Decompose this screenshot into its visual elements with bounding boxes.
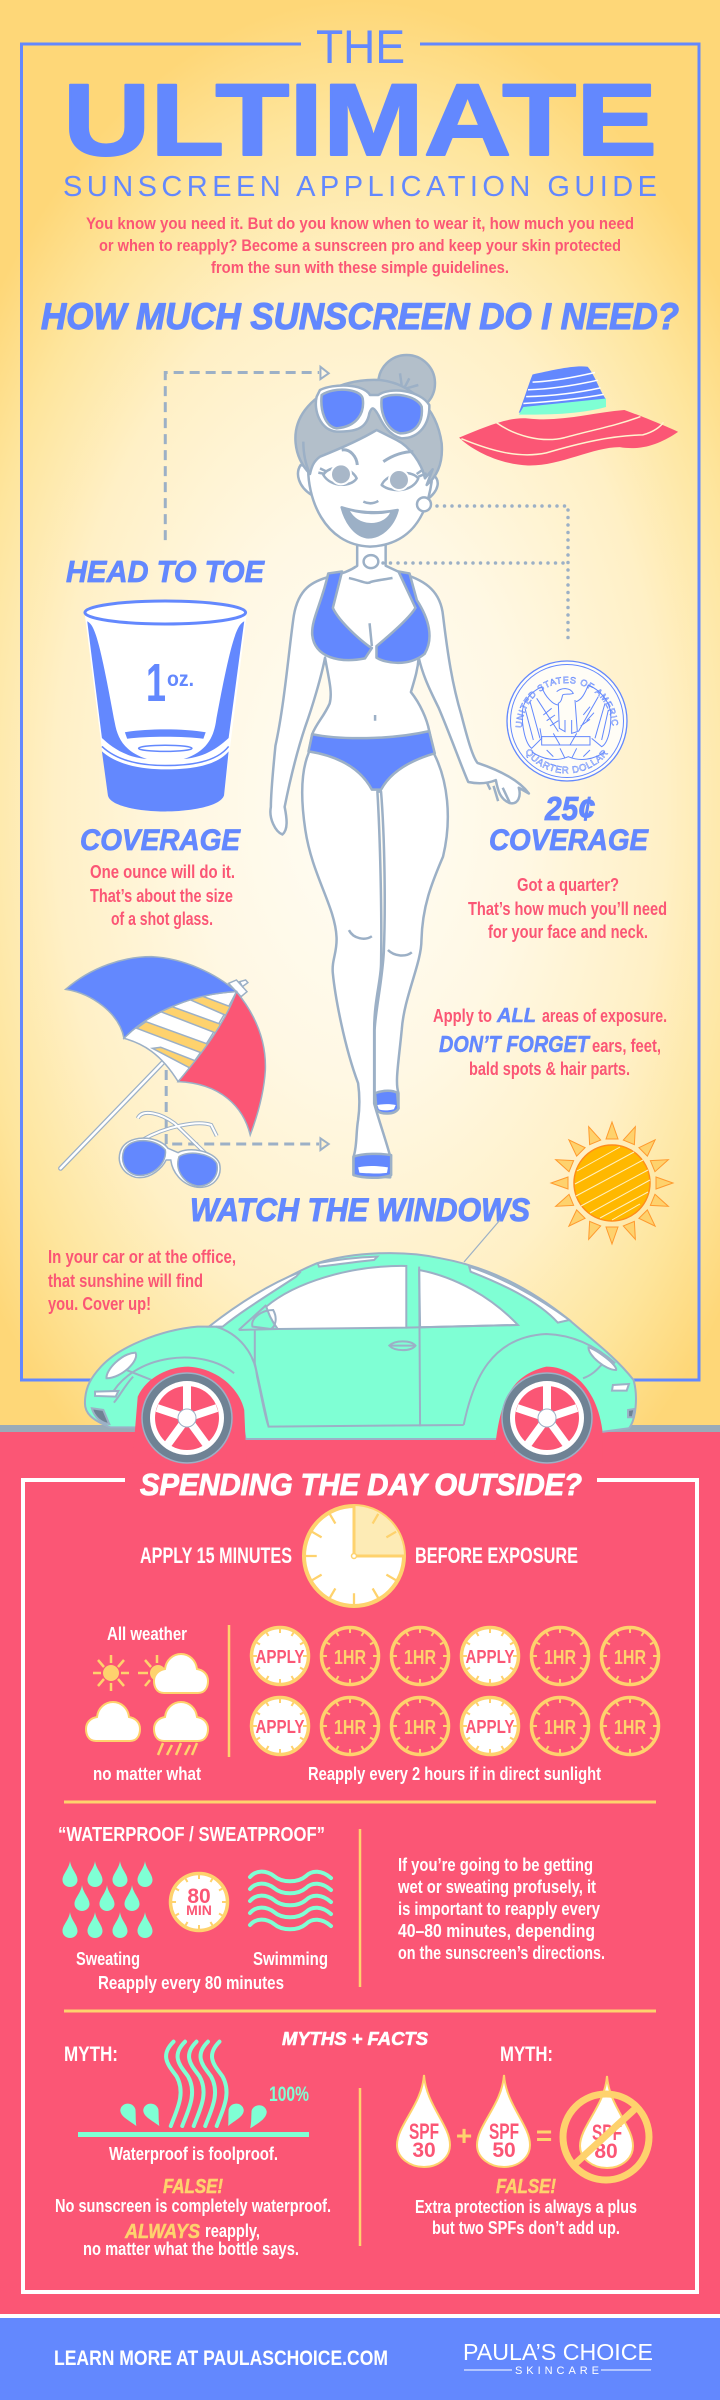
glass label: 1 oz: 1 bbox=[146, 653, 166, 713]
hat: brim bbox=[459, 410, 678, 466]
barrier bar bbox=[78, 2132, 309, 2137]
glass: body bbox=[85, 616, 247, 811]
text: false right: FALSE! bbox=[496, 2176, 556, 2198]
car: body lines bbox=[110, 1267, 615, 1427]
coin: lettering: UNITED STATES OF AMERICA bbox=[516, 676, 618, 728]
panel: spending the day outside background bbox=[0, 1432, 720, 2314]
head: ears bbox=[298, 465, 438, 500]
text: no matter what: no matter what bbox=[93, 1764, 201, 1784]
icon: SPF 30 drop: 30 bbox=[412, 2139, 436, 2162]
text: wet or sweating advice: on the sunscreen’s directions. bbox=[398, 1943, 605, 1963]
umbrella: blue panel bbox=[66, 957, 236, 1038]
beach umbrella illustration bbox=[61, 957, 265, 1168]
row 2 clocks: 1HR bbox=[334, 1717, 366, 1739]
label: 25 cents: 25¢ bbox=[544, 790, 596, 827]
text: wet or sweating advice bbox=[397, 1855, 605, 1963]
glass label: 1 oz bbox=[146, 653, 194, 713]
glass label: 1 oz: oz. bbox=[167, 668, 194, 691]
background: warm sun glow bbox=[0, 0, 720, 1426]
footer: logo bbox=[463, 2339, 653, 2377]
title: ULTIMATE: ULTIMATE bbox=[63, 63, 657, 177]
head: nose bbox=[363, 501, 378, 503]
text: 100 percent: 100% bbox=[269, 2083, 309, 2106]
text: reapply every 80: Reapply every 80 minutes bbox=[98, 1973, 284, 1993]
shot glass illustration bbox=[85, 601, 247, 811]
section: apply 15 minutes bbox=[140, 1506, 578, 1606]
text: extra protection bbox=[415, 2197, 637, 2238]
icon: rain cloud bbox=[154, 1702, 208, 1755]
text: apply to all areas: ALL bbox=[496, 1005, 536, 1027]
divider bbox=[228, 1625, 230, 1757]
text: got a quarter: Got a quarter? bbox=[517, 875, 619, 895]
icon: SPF 50 drop: 50 bbox=[492, 2139, 516, 2162]
coin: eagle bbox=[522, 685, 611, 759]
woman: sandals bbox=[354, 1091, 398, 1178]
woman: body bbox=[270, 539, 529, 1177]
sunglasses: frames bbox=[119, 1138, 220, 1187]
car: rear window bbox=[419, 1270, 518, 1327]
sun: disc bbox=[574, 1145, 650, 1221]
pointer line to car bbox=[464, 1220, 500, 1262]
icon: cloud bbox=[86, 1702, 140, 1741]
car: front window bbox=[266, 1266, 406, 1329]
row 1 clocks: 1HR bbox=[614, 1647, 646, 1669]
section: all weather bbox=[86, 1624, 208, 1784]
umbrella: red panel bbox=[178, 992, 265, 1135]
head: bun bbox=[378, 355, 435, 412]
woman: head bbox=[295, 355, 442, 547]
head: eyebrows bbox=[342, 450, 413, 465]
glass: inner shading bbox=[125, 729, 206, 739]
text: sweating: Sweating bbox=[76, 1949, 140, 1969]
hat: band bbox=[519, 399, 606, 415]
text: apply to all areas: bald spots & hair parts. bbox=[469, 1059, 630, 1079]
text: wet or sweating advice: If you’re going to be getting bbox=[398, 1855, 593, 1875]
glass: rim bbox=[85, 601, 246, 624]
subtitle: SUNSCREEN APPLICATION GUIDE bbox=[63, 171, 657, 203]
umbrella: striped panel bbox=[124, 992, 236, 1082]
text: wet or sweating advice: is important to reapply every bbox=[398, 1899, 600, 1919]
woman: bikini bottom bbox=[309, 731, 435, 790]
head: eyes bbox=[318, 464, 427, 490]
head: sunglasses bbox=[316, 385, 429, 438]
text: before exposure: BEFORE EXPOSURE bbox=[415, 1543, 578, 1568]
icon: waves over barrier bbox=[120, 2042, 267, 2128]
head: mouth bbox=[342, 507, 398, 537]
car: windshield and rear glass highlights bbox=[209, 1257, 569, 1327]
text: one ounce bbox=[90, 862, 235, 929]
glass: base bbox=[102, 751, 229, 811]
row 1 clocks: 1HR bbox=[404, 1647, 436, 1669]
plus sign: + bbox=[456, 2120, 472, 2151]
icon: sweat drops bbox=[62, 1861, 152, 1938]
text: no matter what the bottle says: no matter what the bottle says. bbox=[83, 2239, 299, 2259]
woman: figure bbox=[270, 539, 529, 1178]
row 2 clocks: APPLY bbox=[256, 1717, 304, 1737]
heading: coverage: COVERAGE bbox=[80, 824, 241, 857]
icon: SPF 50 drop bbox=[477, 2075, 530, 2167]
text: always reapply bbox=[124, 2221, 260, 2243]
text: apply to all areas: areas of exposure. bbox=[542, 1006, 667, 1026]
text: got a quarter: That’s how much you’ll need bbox=[468, 899, 667, 919]
sunglasses illustration bbox=[119, 1113, 220, 1187]
text: always reapply: ALWAYS bbox=[124, 2221, 201, 2243]
hat illustration bbox=[459, 366, 678, 466]
text: wet or sweating advice: 40–80 minutes, depending bbox=[398, 1921, 595, 1941]
text: false left: FALSE! bbox=[163, 2176, 223, 2198]
arrow: dashed head arrow bbox=[165, 367, 329, 540]
icon: SPF 80 crossed out: 80 bbox=[594, 2140, 618, 2163]
text: got a quarter bbox=[468, 875, 667, 942]
hat: crown bbox=[519, 366, 606, 413]
car: rear wheel bbox=[502, 1373, 592, 1463]
text: waterproof is foolproof: Waterproof is foolproof. bbox=[109, 2144, 278, 2164]
woman: knees and hand detail bbox=[349, 782, 510, 956]
car illustration bbox=[85, 1253, 636, 1463]
coverage left bbox=[80, 824, 241, 929]
arrow: dashed toe arrow bbox=[166, 1070, 329, 1150]
sunglasses: lenses bbox=[123, 1141, 165, 1175]
text: myth label left: MYTH: bbox=[64, 2043, 118, 2066]
icon: SPF 30 drop: SPF bbox=[409, 2119, 439, 2144]
coin: lettering bbox=[516, 676, 618, 774]
car: wheel arches bbox=[132, 1367, 602, 1463]
white separator bbox=[0, 2314, 720, 2318]
heading: head to toe: HEAD TO TOE bbox=[66, 554, 265, 589]
text: apply to all areas: Apply to bbox=[433, 1006, 492, 1026]
text: in your car: In your car or at the office, bbox=[48, 1247, 236, 1267]
row 1 clocks: 1HR bbox=[334, 1647, 366, 1669]
intro text: or when to reapply? Become a sunscreen pro and keep your skin protected bbox=[99, 236, 621, 255]
row 2 clocks: 1HR bbox=[544, 1717, 576, 1739]
grey ground strip bbox=[0, 1425, 720, 1433]
row 2 clocks bbox=[250, 1696, 660, 1756]
woman: collar and navel bbox=[349, 578, 393, 721]
clock: 15 minutes bbox=[304, 1506, 404, 1606]
car: headlights bbox=[106, 1347, 616, 1378]
text: apply to all areas: ears, feet, bbox=[592, 1036, 661, 1056]
footer: logo: PAULA’S CHOICE bbox=[463, 2339, 653, 2365]
text: one ounce: One ounce will do it. bbox=[90, 862, 235, 882]
icon: sun behind cloud bbox=[138, 1654, 208, 1693]
row 2 clocks: 1HR bbox=[404, 1717, 436, 1739]
illustration: woman in bikini bbox=[270, 355, 529, 1178]
icon: sun bbox=[93, 1655, 129, 1691]
footer: learn more: LEARN MORE AT PAULASCHOICE.COM bbox=[54, 2347, 388, 2370]
text: extra protection: Extra protection is always a plus bbox=[415, 2197, 637, 2217]
car: body bbox=[85, 1253, 636, 1463]
icon: SPF 80 crossed out bbox=[563, 2076, 649, 2180]
text: one ounce: of a shot glass. bbox=[111, 909, 213, 929]
car: side markers bbox=[95, 1384, 629, 1397]
woman: necklace bbox=[364, 555, 378, 568]
row 1 clocks: 1HR bbox=[544, 1647, 576, 1669]
footer band bbox=[0, 2318, 720, 2400]
intro text bbox=[86, 214, 634, 277]
row 1 clocks bbox=[250, 1626, 660, 1686]
text: all weather: All weather bbox=[107, 1624, 187, 1644]
intro text: You know you need it. But do you know when to wear it, how much you need bbox=[86, 214, 634, 233]
text: always reapply: reapply, bbox=[205, 2221, 260, 2241]
heading: watch the windows: WATCH THE WINDOWS bbox=[190, 1192, 531, 1228]
heading: spending the day outside: SPENDING THE DAY OUTSIDE? bbox=[140, 1467, 582, 1502]
icon: SPF 30 drop bbox=[397, 2075, 450, 2167]
head: earring bbox=[417, 497, 431, 511]
heading: coverage right: COVERAGE bbox=[489, 824, 649, 857]
head: face bbox=[308, 430, 432, 547]
text: myth label right: MYTH: bbox=[500, 2043, 553, 2066]
icon: 80 minute clock bbox=[169, 1872, 229, 1932]
heading: waterproof sweatproof: “WATERPROOF / SWEATPROOF” bbox=[58, 1824, 325, 1846]
car: door handle bbox=[389, 1341, 415, 1350]
title: THE: THE bbox=[316, 20, 405, 73]
text: in your car: that sunshine will find bbox=[48, 1271, 203, 1291]
section: myth waterproof bbox=[55, 2042, 331, 2259]
section: myth SPF bbox=[397, 2043, 649, 2238]
text: reapply every 2 hours: Reapply every 2 hours if in direct sunlight bbox=[308, 1764, 601, 1784]
row 2 clocks: 1HR bbox=[614, 1717, 646, 1739]
umbrella: pole bbox=[61, 1060, 165, 1168]
section: waterproof bbox=[58, 1824, 331, 1993]
text: in your car bbox=[48, 1247, 236, 1314]
sunglasses: arms bbox=[138, 1113, 217, 1157]
text: one ounce: That’s about the size bbox=[90, 886, 233, 906]
text: extra protection: but two SPFs don’t add up. bbox=[432, 2218, 620, 2238]
icon: 80 minute clock: MIN bbox=[186, 1902, 212, 1918]
text: swimming: Swimming bbox=[253, 1949, 328, 1969]
white frame of outdoor panel bbox=[23, 1480, 697, 2292]
text: wet or sweating advice: wet or sweating profusely, it bbox=[397, 1877, 596, 1897]
heading: myths and facts: MYTHS + FACTS bbox=[282, 2029, 428, 2049]
25 cent and coverage bbox=[468, 790, 667, 942]
text: apply 15 minutes: APPLY 15 MINUTES bbox=[140, 1543, 292, 1568]
car: front wheel bbox=[142, 1373, 232, 1463]
icon: SPF 80 crossed out: SPF bbox=[592, 2120, 622, 2145]
title block bbox=[63, 20, 657, 203]
text: no sunscreen: No sunscreen is completely waterproof. bbox=[55, 2196, 331, 2216]
reapply clock grid bbox=[250, 1626, 660, 1756]
heading: how much sunscreen: HOW MUCH SUNSCREEN DO I NEED? bbox=[41, 296, 679, 337]
icon: SPF 50 drop: SPF bbox=[489, 2119, 519, 2144]
sun: rays bbox=[551, 1122, 673, 1244]
sun icon bbox=[551, 1122, 673, 1244]
icon: 80 minute clock: 80 bbox=[187, 1885, 211, 1908]
row 2 clocks: APPLY bbox=[466, 1717, 514, 1737]
row 1 clocks: APPLY bbox=[466, 1647, 514, 1667]
text: apply to all areas bbox=[433, 1005, 667, 1079]
text: got a quarter: for your face and neck. bbox=[488, 922, 648, 942]
blue page frame bbox=[22, 44, 699, 1380]
head: hair bbox=[295, 380, 442, 485]
row 1 clocks: APPLY bbox=[256, 1647, 304, 1667]
glass: side shading bbox=[87, 621, 244, 759]
woman: bikini top bbox=[312, 572, 372, 660]
coin: lettering: QUARTER DOLLAR bbox=[526, 749, 608, 774]
text: apply to all areas: DON’T FORGET bbox=[439, 1031, 591, 1057]
umbrella: tip bbox=[229, 980, 248, 997]
dotted connectors: face and neck bbox=[383, 506, 568, 644]
footer: logo: SKINCARE bbox=[515, 2365, 599, 2377]
text: in your car: you. Cover up! bbox=[48, 1294, 151, 1314]
equals sign: = bbox=[536, 2120, 552, 2151]
quarter coin bbox=[506, 660, 628, 782]
icon: swimming waves bbox=[250, 1872, 331, 1929]
intro text: from the sun with these simple guidelines. bbox=[211, 258, 509, 277]
